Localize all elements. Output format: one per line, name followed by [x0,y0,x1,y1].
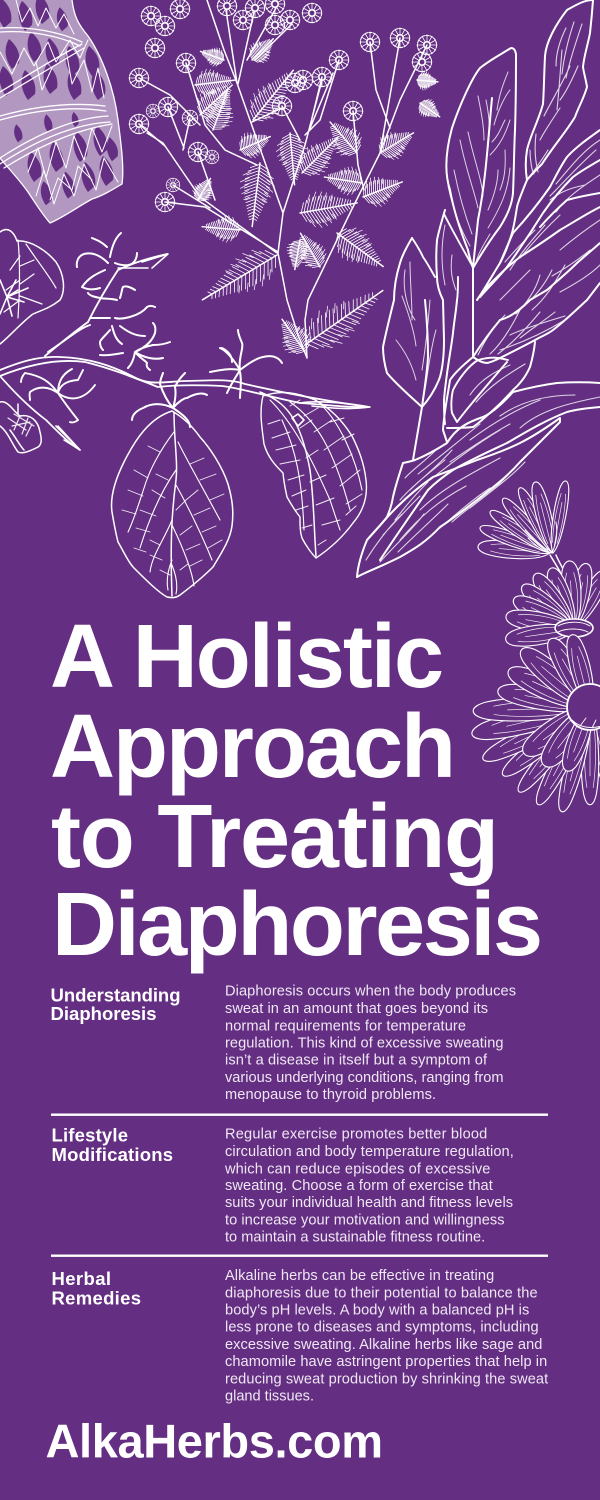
title: to Treating [51,787,499,887]
body text: understanding diaphoresis: various underlying conditions, ranging from [225,1070,504,1086]
section: understanding diaphoresis [50,984,516,1103]
body text: herbal remedies: gland tissues. [225,1389,314,1405]
body text: lifestyle modifications [224,1127,514,1245]
body text: understanding diaphoresis: sweat in an amount that goes beyond its [225,1001,488,1017]
heading: herbal remedies [52,1268,141,1308]
section: lifestyle modifications [52,1125,514,1245]
leaf hatching [448,72,510,262]
body text: herbal remedies: reducing sweat production by shrinking the sweat [225,1371,548,1387]
sage scale windows [0,0,118,205]
branch [0,357,368,407]
buds and fruit [58,254,168,450]
heading: lifestyle modifications [52,1125,173,1165]
body text: lifestyle modifications: sweating. Choose a form of exercise that [225,1178,493,1194]
heading: herbal remedies: Herbal [52,1268,111,1289]
divider 1 [51,1114,548,1116]
chamomile fronds [193,239,287,316]
body text: herbal remedies: Alkaline herbs can be effective in treating [225,1268,494,1284]
title: Diaphoresis [52,875,543,975]
divider 2 [51,1254,548,1257]
illustration: left leaf [0,230,63,344]
body text: understanding diaphoresis: normal requirements for temperature [225,1018,466,1034]
branch flowers [77,233,137,289]
body text: understanding diaphoresis: regulation. This kind of excessive sweating [225,1035,504,1051]
chamomile stems [139,0,427,358]
illustration: sage bundle [0,0,123,223]
body text: herbal remedies: excessive sweating. Alkaline herbs like sage and [225,1337,542,1353]
heading: lifestyle modifications: Lifestyle [52,1125,128,1146]
illustration: daisies [469,480,600,814]
body text: lifestyle modifications: to maintain a sustainable fitness routine. [225,1229,485,1245]
body text: lifestyle modifications: which can reduce episodes of excessive [224,1161,490,1177]
body text: herbal remedies: less prone to diseases and symptoms, including [225,1320,539,1336]
heading: understanding diaphoresis: Diaphoresis [50,1003,156,1024]
body text: herbal remedies: chamomile have astringent properties that help in [225,1354,547,1370]
illustration: hanging leaf [112,411,233,598]
title: A Holistic [50,607,444,707]
body text: understanding diaphoresis [225,984,516,1103]
illustration: chamomile plant [129,0,445,361]
body text: lifestyle modifications: to increase your motivation and willingness [225,1212,504,1228]
body text: lifestyle modifications: suits your individual health and fitness levels [225,1195,513,1211]
illustration: dark-veined leaf [260,392,370,558]
body text: understanding diaphoresis: isn’t a disease in itself but a symptom of [225,1053,488,1069]
leaf outlines and stems [446,48,516,268]
body text: herbal remedies: body’s pH levels. A body with a balanced pH is [225,1303,529,1319]
body text: lifestyle modifications: Regular exercise promotes better blood [225,1127,487,1143]
heading: understanding diaphoresis [50,985,180,1024]
body text: herbal remedies [225,1268,548,1405]
body text: understanding diaphoresis: Diaphoresis occurs when the body produces [225,984,516,1000]
flower bud [477,480,572,590]
heading: lifestyle modifications: Modifications [52,1144,173,1165]
title [50,607,543,975]
section: herbal remedies [52,1268,548,1405]
heading: understanding diaphoresis: Understanding [50,985,180,1006]
upper flower [504,560,600,649]
footer website: AlkaHerbs.com [46,1414,383,1467]
illustration: large leaves [357,0,600,577]
body text: lifestyle modifications: circulation and body temperature regulation, [225,1144,514,1160]
body text: herbal remedies: diaphoresis due to their potential to balance the [225,1285,538,1301]
heading: herbal remedies: Remedies [52,1287,141,1308]
title: Approach [50,697,456,797]
illustration: witch hazel branch [0,233,368,453]
body text: understanding diaphoresis: menopause to thyroid problems. [225,1087,436,1103]
chamomile flowers [141,6,161,26]
lower flower [469,632,600,814]
